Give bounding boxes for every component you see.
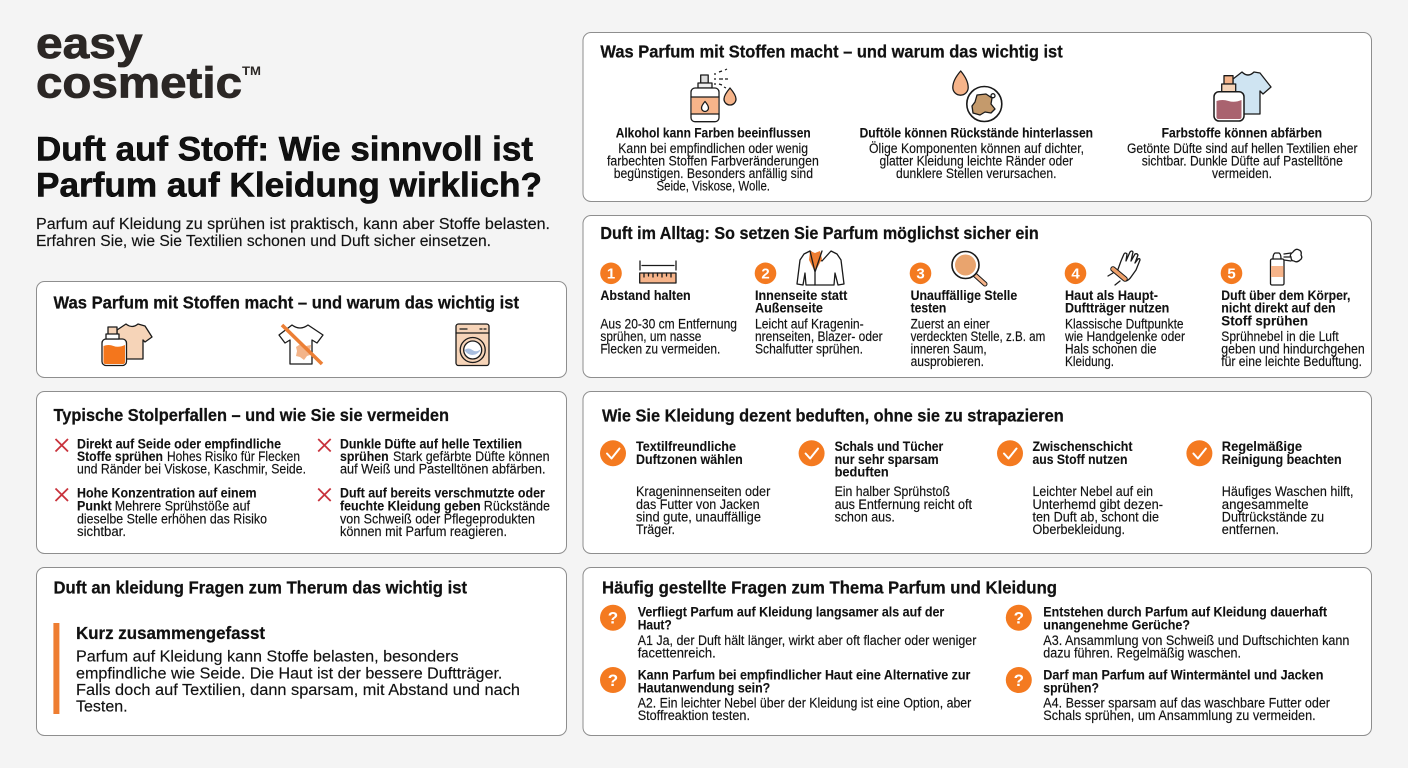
tip 1: sind gute, unauffällige <box>636 510 761 525</box>
question 3 <box>1006 605 1349 661</box>
text: oils: Duftöle können Rückstände hinterlassen <box>860 125 1093 140</box>
tip 1 <box>600 439 771 537</box>
question 2: ? <box>608 671 618 690</box>
icon: oil drop and stain <box>953 71 1002 122</box>
step 2: Schalfutter sprühen. <box>755 342 863 357</box>
step 3: ausprobieren. <box>911 354 984 369</box>
text: alcohol: farbechten Stoffen Farbveränderungen <box>607 154 819 169</box>
question 4: sprühen? <box>1043 680 1099 695</box>
icon: blazer <box>797 251 844 285</box>
icon: ruler <box>640 261 676 283</box>
step 1: Flecken zu vermeiden. <box>600 342 720 357</box>
pitfall: silk <box>56 436 306 477</box>
tip 1: Träger. <box>636 522 675 537</box>
question 3: ? <box>1014 608 1024 628</box>
logo <box>36 19 261 108</box>
question 2: A2. Ein leichter Nebel über der Kleidung ist eine Option, aber <box>638 695 972 710</box>
icon: spray mist <box>1270 249 1302 285</box>
icon: magnifier <box>952 252 985 284</box>
pitfall: silk: Hohes Risiko für Flecken <box>167 449 300 464</box>
question 1: Verfliegt Parfum auf Kleidung langsamer als auf der <box>638 605 945 620</box>
question 3: unangenehme Gerüche? <box>1043 618 1190 633</box>
step 2: Innenseite statt <box>755 288 848 303</box>
tip 4: Duftrückstände zu <box>1222 510 1324 525</box>
summary heading: Kurz zusammengefasst <box>76 623 265 643</box>
intro text <box>36 216 550 250</box>
heading: typical pitfalls: Typische Stolperfallen – und wie Sie sie vermeiden <box>54 405 449 425</box>
icon: perfume bottle and shirt <box>102 324 152 366</box>
heading: summary panel: Duft an kleidung Fragen zum Therum das wichtig ist <box>54 577 467 597</box>
text: dyes <box>1127 125 1358 181</box>
tip 3: Unterhemd gibt dezen- <box>1032 497 1163 512</box>
pitfall: dark scents: sprühen <box>340 449 389 464</box>
question 3: dazu führen. Regelmäßig waschen. <box>1043 646 1241 661</box>
question 4: Schals sprühen, um Ansammlung zu vermeiden. <box>1043 708 1316 723</box>
tip 4: Häufiges Waschen hilft, <box>1222 484 1354 499</box>
step 1: Abstand halten <box>600 288 691 303</box>
step 3: inneren Saum, <box>911 342 987 357</box>
step 1: Aus 20-30 cm Entfernung <box>600 316 737 331</box>
tip 3: aus Stoff nutzen <box>1032 452 1127 467</box>
tip 4: entfernen. <box>1222 522 1279 537</box>
tip 2: beduften <box>835 465 889 480</box>
tip 2: aus Entfernung reicht oft <box>835 497 972 512</box>
text: oils: glatter Kleidung leichte Ränder oder <box>880 154 1073 169</box>
accent bar <box>53 623 59 714</box>
panel: subtle scenting tips <box>583 392 1372 554</box>
step 5: geben und hindurchgehen <box>1221 342 1365 357</box>
tip 1: Krageninnenseiten oder <box>636 484 771 499</box>
pitfall: high concentration: Mehrere Sprühstöße auf <box>115 499 250 514</box>
summary text: Falls doch auf Textilien, dann sparsam, mit Abstand und nach <box>76 682 520 699</box>
pitfall: high concentration <box>56 486 267 539</box>
step 2: 2 <box>761 266 770 282</box>
text: dyes: Getönte Düfte sind auf hellen Textilien eher <box>1127 141 1358 156</box>
question 3: A3. Ansammlung von Schweiß und Duftschichten kann <box>1043 633 1349 648</box>
text: alcohol: Alkohol kann Farben beeinflussen <box>616 125 811 140</box>
logo: TM <box>242 66 261 78</box>
tip 4: Reinigung beachten <box>1222 452 1342 467</box>
tip 2: Ein halber Sprühstoß <box>835 484 950 499</box>
pitfall: silk: und Ränder bei Viskose, Kaschmir, Seide. <box>77 462 306 477</box>
tip 3: Oberbekleidung. <box>1032 522 1125 537</box>
pitfall: soiled clothing <box>318 486 550 539</box>
pitfall: silk: Direkt auf Seide oder empfindliche <box>77 436 281 451</box>
pitfall: high concentration: Hohe Konzentration auf einem <box>77 486 257 501</box>
summary text: empfindliche wie Seide. Die Haut ist der bessere Duftträger. <box>76 665 502 682</box>
step 4: 4 <box>1071 266 1080 282</box>
pitfall: high concentration: dieselbe Stelle erhöhen das Risiko <box>77 512 267 526</box>
pitfall: dark scents: Dunkle Düfte auf helle Textilien <box>340 436 522 451</box>
intro text: Erfahren Sie, wie Sie Textilien schonen und Duft sicher einsetzen. <box>36 233 491 250</box>
step 4: Kleidung. <box>1065 354 1114 369</box>
panel: everyday steps <box>583 216 1372 378</box>
icon: spray bottle with drop <box>691 69 736 122</box>
summary text: Testen. <box>76 699 128 716</box>
step 5 <box>1221 249 1365 369</box>
panel: what perfume does to fabrics <box>583 32 1372 202</box>
step 5: 5 <box>1227 266 1236 282</box>
tip 1: Textilfreundliche <box>636 439 736 454</box>
intro text: Parfum auf Kleidung zu sprühen ist praktisch, kann aber Stoffe belasten. <box>36 216 550 233</box>
question 4: ? <box>1014 671 1024 690</box>
logo: cosmetic <box>36 59 242 108</box>
step 2: Außenseite <box>755 301 823 316</box>
text: oils <box>860 125 1093 181</box>
question 1: ? <box>608 608 618 628</box>
text: dyes: sichtbar. Dunkle Düfte auf Pastelltöne <box>1142 154 1343 169</box>
question 4: A4. Besser sparsam auf das waschbare Futter oder <box>1043 695 1330 710</box>
question 1 <box>600 605 977 661</box>
tip 3 <box>997 439 1163 537</box>
step 1: 1 <box>607 266 615 282</box>
step 4 <box>1064 251 1185 369</box>
step 4: Duftträger nutzen <box>1065 301 1169 316</box>
heading: fabric effects overview: Was Parfum mit Stoffen macht – und warum das wichtig ist <box>54 292 519 312</box>
pitfall: soiled clothing: können mit Parfum reagieren. <box>340 524 507 539</box>
step 3: verdeckten Stelle, z.B. am <box>911 329 1045 344</box>
question 1: Haut? <box>638 618 672 633</box>
text: dyes: vermeiden. <box>1212 166 1272 181</box>
pitfall: high concentration: sichtbar. <box>77 524 126 539</box>
step 5: für eine leichte Beduftung. <box>1221 354 1362 369</box>
pitfall: high concentration: Punkt <box>77 499 112 514</box>
pitfall: soiled clothing: von Schweiß oder Pflegeprodukten <box>340 512 535 526</box>
tip 3: Leichter Nebel auf ein <box>1032 484 1153 499</box>
question 1: facettenreich. <box>638 646 716 661</box>
icon: stained shirt crossed out <box>279 325 323 364</box>
heading: everyday steps: Duft im Alltag: So setzen Sie Parfum möglichst sicher ein <box>600 223 1039 243</box>
step 4: Haut als Haupt- <box>1065 288 1158 303</box>
text: oils: Ölige Komponenten können auf dichter, <box>869 141 1084 156</box>
text: dyes: Farbstoffe können abfärben <box>1162 125 1322 140</box>
tip 2 <box>799 439 972 525</box>
step 3: Zuerst an einer <box>911 316 990 331</box>
title: Duft auf Stoff: Wie sinnvoll ist <box>36 130 533 168</box>
panel: fabric effects overview <box>36 282 566 378</box>
pitfall: soiled clothing: feuchte Kleidung geben <box>340 499 481 514</box>
text: oils: dunklere Stellen verursachen. <box>896 166 1056 181</box>
tip 4 <box>1186 439 1354 537</box>
tip 4: Regelmäßige <box>1222 439 1302 454</box>
tip 2: Schals und Tücher <box>835 439 944 454</box>
step 2: nrenseiten, Blazer- oder <box>755 329 883 344</box>
step 2: Leicht auf Kragenin- <box>755 316 864 331</box>
icon: washing machine <box>456 324 489 366</box>
heading: subtle scenting: Wie Sie Kleidung dezent beduften, ohne sie zu strapazieren <box>602 406 1064 426</box>
panel: FAQ <box>583 568 1372 736</box>
step 5: nicht direkt auf den <box>1221 301 1336 316</box>
icon: hand <box>1108 251 1140 285</box>
heading: FAQ: Häufig gestellte Fragen zum Thema Parfum und Kleidung <box>602 577 1057 597</box>
question 2: Stoffreaktion testen. <box>638 708 750 723</box>
pitfall: soiled clothing: Rückstände <box>484 499 550 514</box>
step 3 <box>910 252 1045 369</box>
tip 1: das Futter von Jacken <box>636 497 760 512</box>
panel: summary <box>36 568 566 736</box>
pitfall: dark scents <box>318 436 550 477</box>
summary text: Parfum auf Kleidung kann Stoffe belasten, besonders <box>76 649 459 666</box>
step 4: Klassische Duftpunkte <box>1065 316 1184 331</box>
text: alcohol: Kann bei empfindlichen oder wenig <box>618 141 808 156</box>
tip 1: Duftzonen wählen <box>636 452 743 467</box>
question 2 <box>600 667 972 723</box>
question 3: Entstehen durch Parfum auf Kleidung dauerhaft <box>1043 605 1327 620</box>
step 5: Duft über dem Körper, <box>1221 288 1350 303</box>
title <box>36 130 542 205</box>
step 1 <box>600 261 737 357</box>
step 4: wie Handgelenke oder <box>1064 329 1185 344</box>
tip 3: Zwischenschicht <box>1032 439 1133 454</box>
step 5: Stoff sprühen <box>1221 313 1308 328</box>
step 3: Unauffällige Stelle <box>911 288 1018 303</box>
step 3: testen <box>911 301 946 316</box>
question 4: Darf man Parfum auf Wintermäntel und Jacken <box>1043 667 1323 682</box>
summary text <box>76 649 520 716</box>
icon: tinted perfume and shirt <box>1214 72 1271 121</box>
pitfall: dark scents: Stark gefärbte Düfte können <box>393 449 550 464</box>
question 2: Hautanwendung sein? <box>638 680 770 695</box>
heading: what perfume does: Was Parfum mit Stoffen macht – und warum das wichtig ist <box>600 42 1063 62</box>
step 2 <box>755 251 883 357</box>
pitfall: dark scents: auf Weiß und Pastelltönen abfärben. <box>340 462 546 477</box>
step 5: Sprühnebel in die Luft <box>1221 329 1339 344</box>
text: alcohol: Seide, Viskose, Wolle. <box>656 179 770 194</box>
step 4: Hals schonen die <box>1065 342 1156 357</box>
pitfall: silk: Stoffe sprühen <box>77 449 163 464</box>
tip 2: schon aus. <box>835 510 895 525</box>
pitfall: soiled clothing: Duft auf bereits verschmutzte oder <box>340 486 545 501</box>
tip 4: angesammelte <box>1222 497 1309 512</box>
tip 2: nur sehr sparsam <box>835 452 939 467</box>
step 3: 3 <box>916 266 925 282</box>
step 1: sprühen, um nasse <box>600 329 701 344</box>
logo: easy <box>36 19 143 68</box>
tip 3: ten Duft ab, schont die <box>1032 510 1159 525</box>
question 1: A1 Ja, der Duft hält länger, wirkt aber oft flacher oder weniger <box>638 633 977 648</box>
title: Parfum auf Kleidung wirklich? <box>36 167 542 205</box>
text: alcohol: begünstigen. Besonders anfällig sind <box>614 166 813 181</box>
question 4 <box>1006 667 1330 723</box>
panel: typical pitfalls <box>36 392 566 554</box>
text: alcohol <box>607 125 819 194</box>
question 2: Kann Parfum bei empfindlicher Haut eine Alternative zur <box>638 667 971 682</box>
